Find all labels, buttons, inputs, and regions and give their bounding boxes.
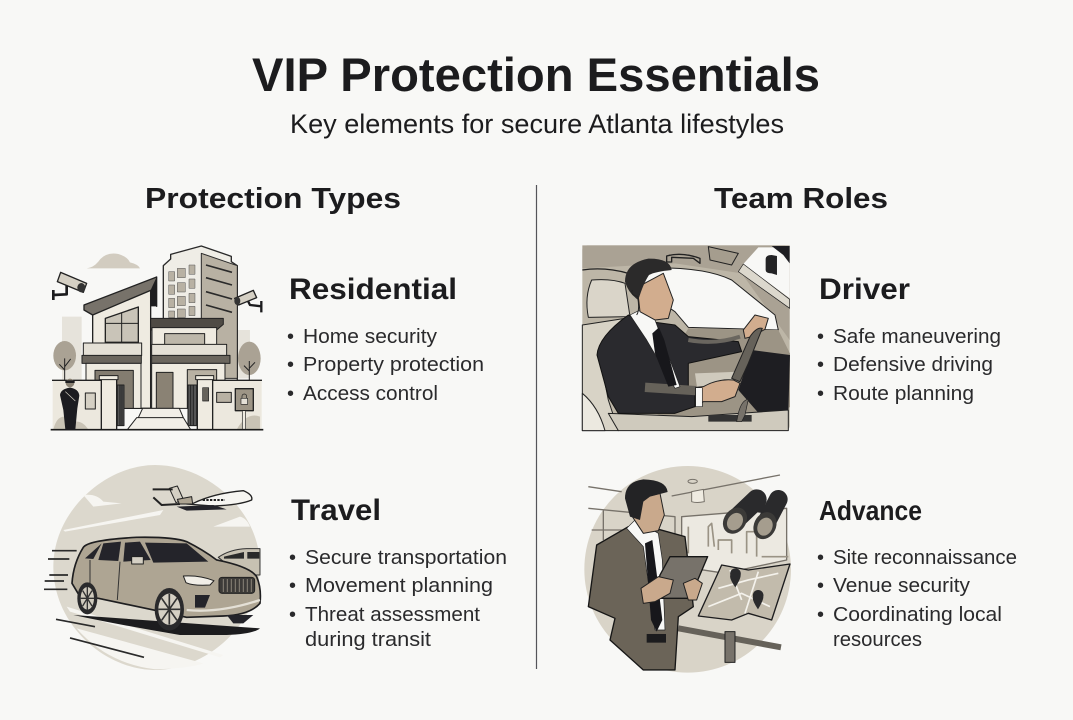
camera left — [53, 272, 87, 300]
text: travel: Secure transportation — [305, 547, 507, 569]
icon: residential building with guard and cameras — [51, 246, 263, 430]
text: travel: • — [289, 575, 296, 597]
agent — [588, 479, 708, 670]
text: driver: Defensive driving — [833, 354, 993, 376]
title: VIP Protection Essentials — [252, 48, 820, 101]
text: travel: during transit — [305, 629, 431, 651]
text: advance: resources — [833, 629, 922, 651]
text: residential: Residential — [289, 273, 457, 306]
text: travel: Movement planning — [305, 575, 493, 597]
text: advance: Site reconnaissance — [833, 547, 1017, 569]
text: driver: Route planning — [833, 383, 974, 405]
text: residential: • — [287, 354, 294, 376]
text: advance: • — [817, 604, 824, 626]
text: advance: Venue security — [833, 575, 970, 597]
text: residential: Home security — [303, 326, 437, 348]
heading: protection types: Protection Types — [145, 183, 401, 215]
map — [698, 564, 790, 620]
text: driver: • — [817, 354, 824, 376]
text: residential: • — [287, 383, 294, 405]
text: travel: • — [289, 547, 296, 569]
text: residential: Access control — [303, 383, 438, 405]
text: driver: • — [817, 383, 824, 405]
driver — [597, 259, 768, 413]
text: advance: • — [817, 575, 824, 597]
text: residential — [287, 273, 484, 405]
binoculars — [718, 499, 781, 543]
text: driver: Safe maneuvering — [833, 326, 1001, 348]
text: driver — [817, 273, 1001, 405]
heading: team roles: Team Roles — [714, 183, 888, 215]
text: advance: Coordinating local — [833, 604, 1002, 626]
railing — [678, 628, 781, 662]
text: advance: • — [817, 547, 824, 569]
text: driver: • — [817, 326, 824, 348]
camera right — [234, 290, 261, 312]
jet — [153, 486, 252, 511]
text: travel: Travel — [291, 494, 381, 527]
text: travel: • — [289, 604, 296, 626]
text: residential: Property protection — [303, 354, 484, 376]
text: travel — [289, 494, 507, 651]
icon: advance agent with tablet, map and binoculars — [584, 466, 791, 673]
text: travel: Threat assessment — [305, 604, 480, 626]
text: residential: • — [287, 326, 294, 348]
subtitle: Key elements for secure Atlanta lifestyles — [290, 109, 784, 139]
text: advance — [817, 495, 1017, 651]
guard — [60, 379, 79, 430]
icon: travel SUV and jet — [44, 465, 260, 670]
text: advance: Advance — [819, 495, 922, 526]
icon: driver in car interior — [582, 245, 790, 431]
text: driver: Driver — [819, 273, 910, 306]
